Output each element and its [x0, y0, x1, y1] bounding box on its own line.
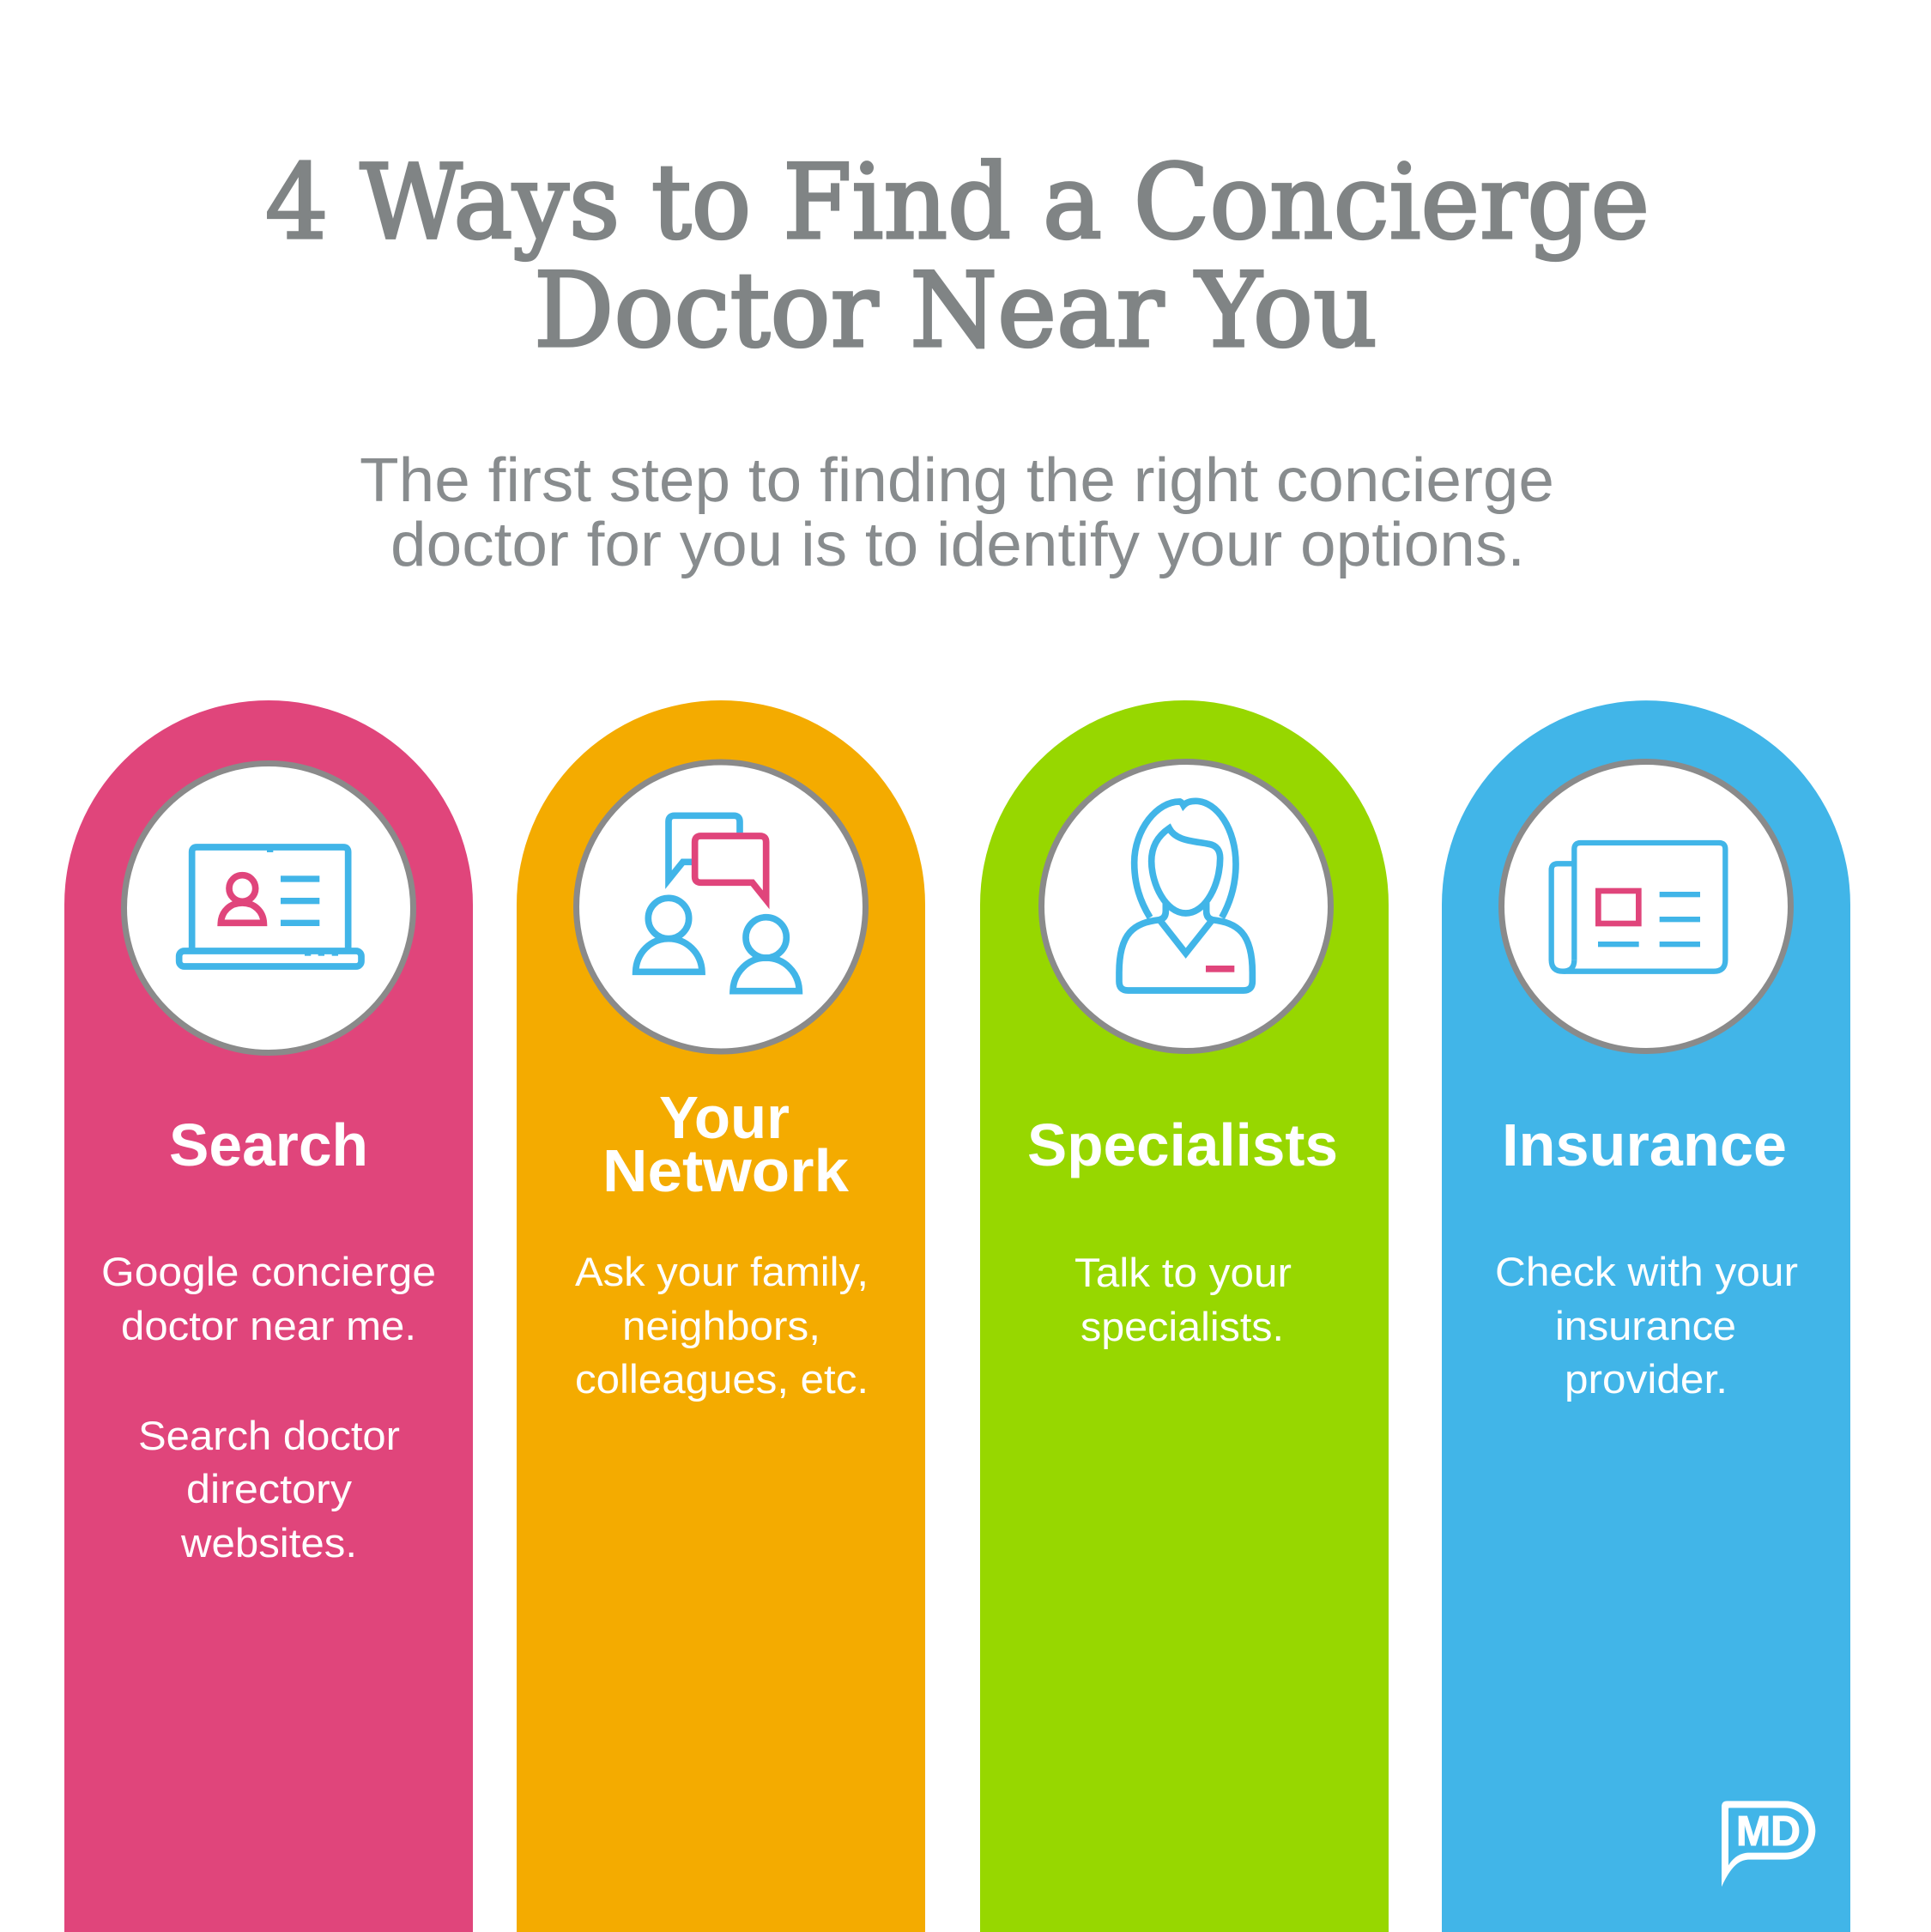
panel: your network [517, 700, 925, 1932]
subtitle: The first step to finding the right concierge [360, 446, 1554, 515]
panel: insurance [1442, 700, 1850, 1932]
text: network tips: Ask your family, [575, 1249, 869, 1294]
subtitle: doctor for you is to identify your options. [390, 511, 1525, 579]
icon: laptop with profile [124, 764, 414, 1052]
subtitle [360, 446, 1554, 579]
icon: doctor woman [1042, 762, 1330, 1051]
text: insurance tip: insurance [1555, 1303, 1736, 1348]
title: Doctor Near You [534, 251, 1377, 371]
logo: MD speech bubble [1722, 1801, 1815, 1887]
text: network tips: neighbors, [622, 1303, 820, 1348]
heading: specialists: Specialists [1027, 1111, 1338, 1178]
text: insurance tip: provider. [1565, 1356, 1728, 1402]
text: specialists tip: Talk to your [1074, 1250, 1292, 1295]
text: network tips: colleagues, etc. [575, 1356, 869, 1402]
text: search tips [101, 1249, 436, 1566]
text: specialists tip [1074, 1250, 1292, 1349]
heading: search: Search [169, 1111, 368, 1178]
text: network tips [575, 1249, 869, 1402]
text: insurance tip: Check with your [1495, 1249, 1798, 1294]
text: search tips: Google concierge [101, 1249, 436, 1294]
heading: your network: Network [602, 1137, 849, 1204]
panel: search [64, 700, 473, 1932]
heading: insurance: Insurance [1502, 1111, 1787, 1178]
title: 4 Ways to Find a Concierge [265, 143, 1650, 263]
icon: two people talking [577, 762, 865, 1051]
title [265, 143, 1650, 371]
text: search tips: Search doctor [138, 1413, 400, 1458]
text: search tips: directory [186, 1466, 353, 1511]
text: specialists tip: specialists. [1081, 1304, 1284, 1349]
text: search tips: websites. [180, 1520, 357, 1566]
text: search tips: doctor near me. [121, 1303, 416, 1348]
logo: MD speech bubble: MD [1736, 1808, 1801, 1855]
panel: specialists [980, 700, 1389, 1932]
text: insurance tip [1495, 1249, 1798, 1402]
heading: your network [602, 1084, 849, 1204]
heading: your network: Your [659, 1084, 790, 1151]
icon: newspaper [1502, 762, 1790, 1051]
